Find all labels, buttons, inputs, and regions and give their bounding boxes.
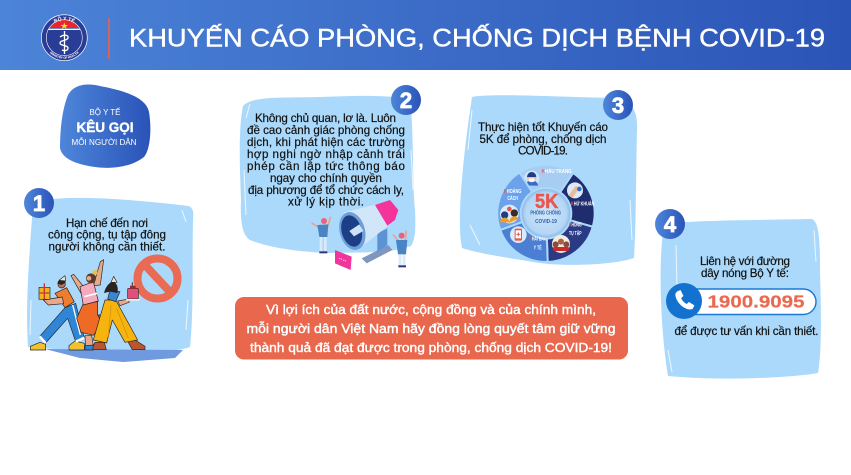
panel 4 top text: [700, 255, 790, 280]
panel 4 top text: dây nóng Bộ Y tế:: [701, 267, 789, 280]
panel 2 text: [247, 112, 405, 208]
panel 2 text: ngay cho chính quyền: [270, 172, 382, 185]
panel 2 text: xử lý kịp thời.: [288, 196, 364, 208]
panel 2 text: địa phương để tổ chức cách ly,: [248, 184, 404, 197]
panel 4 top text: Liên hệ với đường: [700, 255, 790, 268]
panel 2 text: dịch, khi phát hiện các trường: [247, 136, 405, 149]
panel 4 background: [661, 219, 821, 379]
hotline pill: [666, 283, 816, 319]
segment: khai báo y tế: Y TẾ: [534, 245, 542, 252]
orange callout: Vì lợi ích của đất nước, cộng đồng và của chính mình,: [266, 302, 596, 317]
segment: khoảng cách: [497, 172, 532, 230]
panel 3 text: COVID-19.: [518, 144, 568, 158]
pink tablet: [335, 250, 352, 270]
donut centre: COVID-19: [535, 219, 557, 225]
number 2: 2: [400, 88, 412, 113]
ground shadow: [45, 349, 183, 362]
orange callout: [235, 297, 628, 360]
donut centre: 5K: [535, 191, 559, 213]
megaphone: [335, 200, 398, 263]
segment: khử khuẩn: KHỬ KHUẨN: [571, 201, 594, 208]
segment: khai báo y tế: KHAI BÁO: [529, 236, 547, 243]
illustration: partying people: [30, 260, 145, 350]
hotline pill: 1900.9095: [708, 292, 805, 312]
panel 3 text: 5K để phòng, chống dịch: [480, 133, 606, 146]
header band: [0, 0, 851, 70]
logo: Ministry of Health: BỘ Y TẾ: [54, 16, 76, 23]
number 4: [655, 209, 685, 239]
panel 2 text: hợp nghi ngờ nhập cảnh trái: [247, 148, 405, 161]
orange callout: mỗi người dân Việt Nam hãy đồng lòng quyết tâm giữ vững: [246, 321, 616, 336]
badge: Bộ Y tế kêu gọi: KÊU GỌI: [76, 118, 134, 135]
number 1: [24, 188, 54, 218]
icon: phone: [666, 283, 702, 319]
panel 1 text: [48, 217, 166, 254]
header divider: [108, 18, 110, 59]
panel 2 text: Không chủ quan, lơ là. Luôn: [255, 112, 396, 125]
segment: khoảng cách: CÁCH: [507, 195, 518, 202]
panel 1: avoid crowds: [24, 188, 193, 362]
panel 1 background: [27, 198, 193, 352]
panel 2 text: đề cao cảnh giác phòng chống: [247, 124, 405, 137]
number 3: 3: [612, 93, 624, 118]
title: KHUYẾN CÁO PHÒNG, CHỐNG DỊCH BỆNH COVID-19: [129, 22, 825, 52]
panel 2 text: phép cần lập tức thông báo: [247, 160, 405, 173]
donut centre: PHÒNG CHỐNG: [530, 208, 561, 216]
panel 1 text: công cộng, tụ tập đông: [48, 229, 166, 242]
panel 1 text: Hạn chế đến nơi: [66, 217, 148, 230]
right figure: [393, 230, 407, 266]
illustration: megaphone and people: [312, 200, 407, 270]
segment: không tụ tập: [547, 220, 593, 262]
badge: Bộ Y tế kêu gọi: [60, 85, 150, 168]
segment: không tụ tập: TỤ TẬP: [569, 230, 582, 237]
person left: [30, 276, 84, 350]
panel 2: stay vigilant: [240, 85, 421, 270]
number 2: [391, 85, 421, 115]
number 3: [603, 90, 633, 120]
panel 4 bottom text: để được tư vấn khi cần thiết.: [674, 325, 818, 338]
badge: Bộ Y tế kêu gọi: BỘ Y TẾ: [90, 107, 120, 117]
no-entry sign: [138, 258, 178, 298]
logo: Ministry of Health: [41, 14, 88, 61]
number 4: 4: [664, 212, 677, 237]
left figure: [312, 217, 331, 252]
segment: khẩu trang: KHẨU TRANG: [542, 168, 572, 175]
number 1: 1: [33, 191, 45, 216]
5K donut chart: [497, 165, 595, 262]
panel 3 background: [460, 95, 637, 265]
logo: Ministry of Health: MINISTRY OF HEALTH: [50, 51, 79, 59]
orange callout: thành quả đã đạt được trong phòng, chống dịch COVID-19!: [250, 340, 612, 355]
panel 4: hotline: [655, 209, 821, 379]
person right: [93, 276, 145, 350]
panel 3 text: Thực hiện tốt Khuyến cáo: [478, 121, 608, 134]
panel 3 text: [478, 121, 608, 158]
segment: khai báo y tế: [500, 222, 548, 262]
panel 1 text: người không cần thiết.: [48, 240, 166, 254]
segment: không tụ tập: KHÔNG: [569, 221, 582, 229]
donut centre: [522, 189, 570, 238]
badge: Bộ Y tế kêu gọi: MỖI NGƯỜI DÂN: [72, 138, 137, 147]
panel 3: 5K: [460, 90, 637, 265]
person middle: [71, 260, 107, 350]
segment: khoảng cách: KHOẢNG: [504, 188, 521, 195]
panel 2 background: [240, 96, 415, 253]
